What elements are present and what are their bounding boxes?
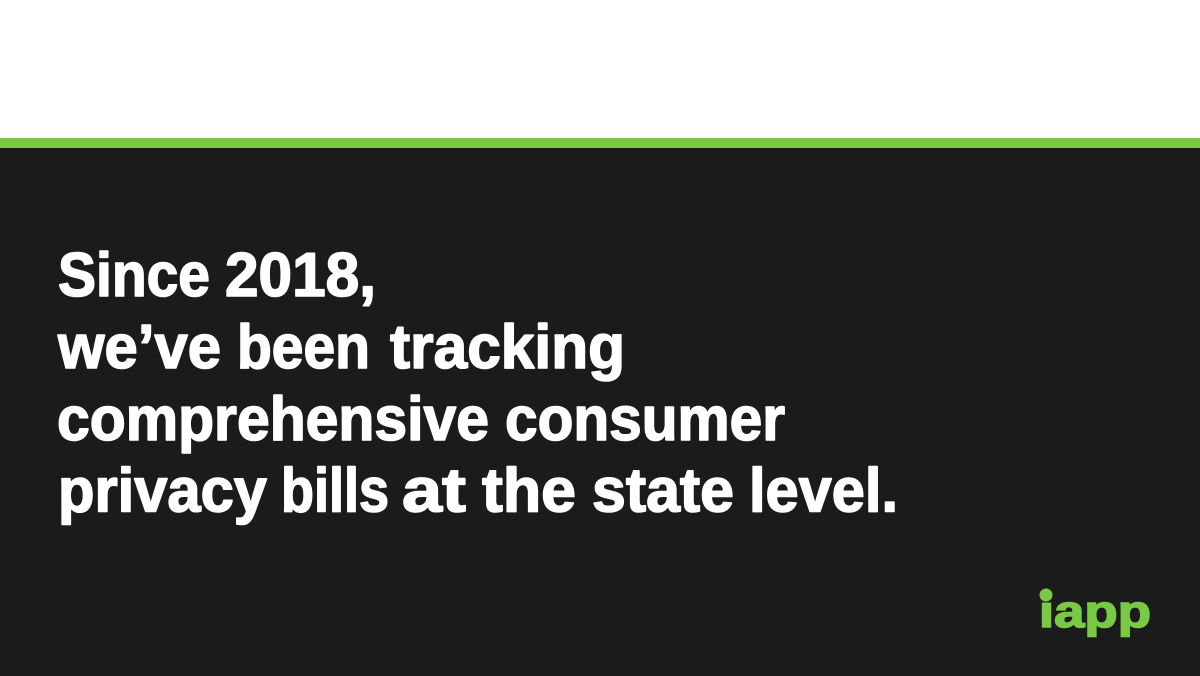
- headline: state: [592, 456, 734, 526]
- headline: at: [402, 456, 466, 526]
- headline: the: [482, 456, 576, 526]
- headline: level.: [749, 456, 898, 526]
- headline: consumer: [505, 385, 785, 454]
- headline: we’ve: [57, 313, 221, 382]
- headline: Since: [58, 241, 210, 310]
- dark panel: [0, 148, 1200, 676]
- headline: 2018,: [225, 241, 376, 310]
- headline: tracking: [390, 313, 625, 382]
- iapp logo: iapp: [1039, 586, 1151, 637]
- headline: been: [237, 313, 370, 382]
- headline: privacy: [58, 456, 267, 526]
- headline: comprehensive: [57, 385, 489, 454]
- headline: [57, 241, 898, 526]
- headline: bills: [281, 456, 389, 526]
- green accent bar: [0, 138, 1200, 148]
